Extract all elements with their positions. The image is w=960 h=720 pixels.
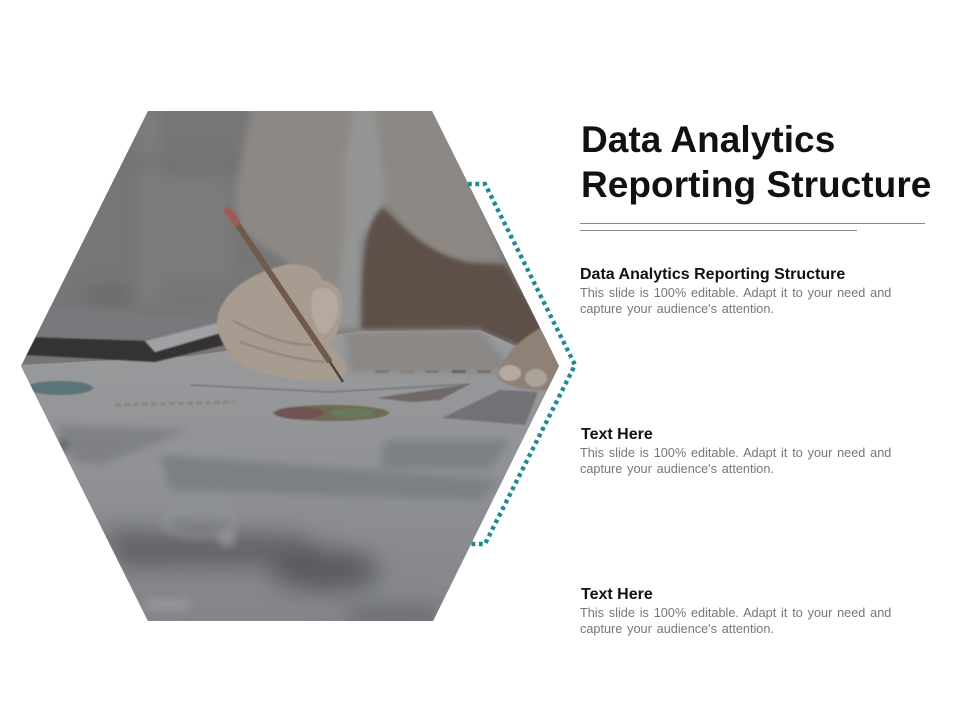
title (581, 119, 931, 205)
text block 3: This slide is 100% editable. Adapt it to your need and (580, 606, 891, 620)
text block 2 (580, 426, 891, 476)
text block 1: Data Analytics Reporting Structure (580, 266, 845, 283)
pencil (228, 211, 343, 382)
text block 2: Text Here (581, 426, 653, 443)
title underlines (580, 223, 925, 231)
book on desk (26, 306, 224, 362)
title: Data Analytics (581, 119, 835, 160)
second hand (497, 328, 562, 390)
text block 1: capture your audience's attention. (580, 302, 774, 316)
text block 2: capture your audience's attention. (580, 462, 774, 476)
dark torso (362, 208, 565, 360)
text block 3: Text Here (581, 586, 653, 603)
title: Reporting Structure (581, 164, 931, 205)
paper charts (27, 370, 538, 425)
panel: hexagon photo of person writing on reports (21, 111, 559, 621)
photo background wall (21, 111, 559, 621)
text block 1 (580, 266, 891, 316)
table and papers (0, 330, 560, 640)
writing hand (217, 264, 346, 381)
text block 1: This slide is 100% editable. Adapt it to your need and (580, 286, 891, 300)
text block 2: This slide is 100% editable. Adapt it to your need and (580, 446, 891, 460)
shirt (235, 105, 505, 330)
blurred lower documents (55, 425, 510, 500)
text block 3 (580, 586, 891, 636)
text block 3: capture your audience's attention. (580, 622, 774, 636)
